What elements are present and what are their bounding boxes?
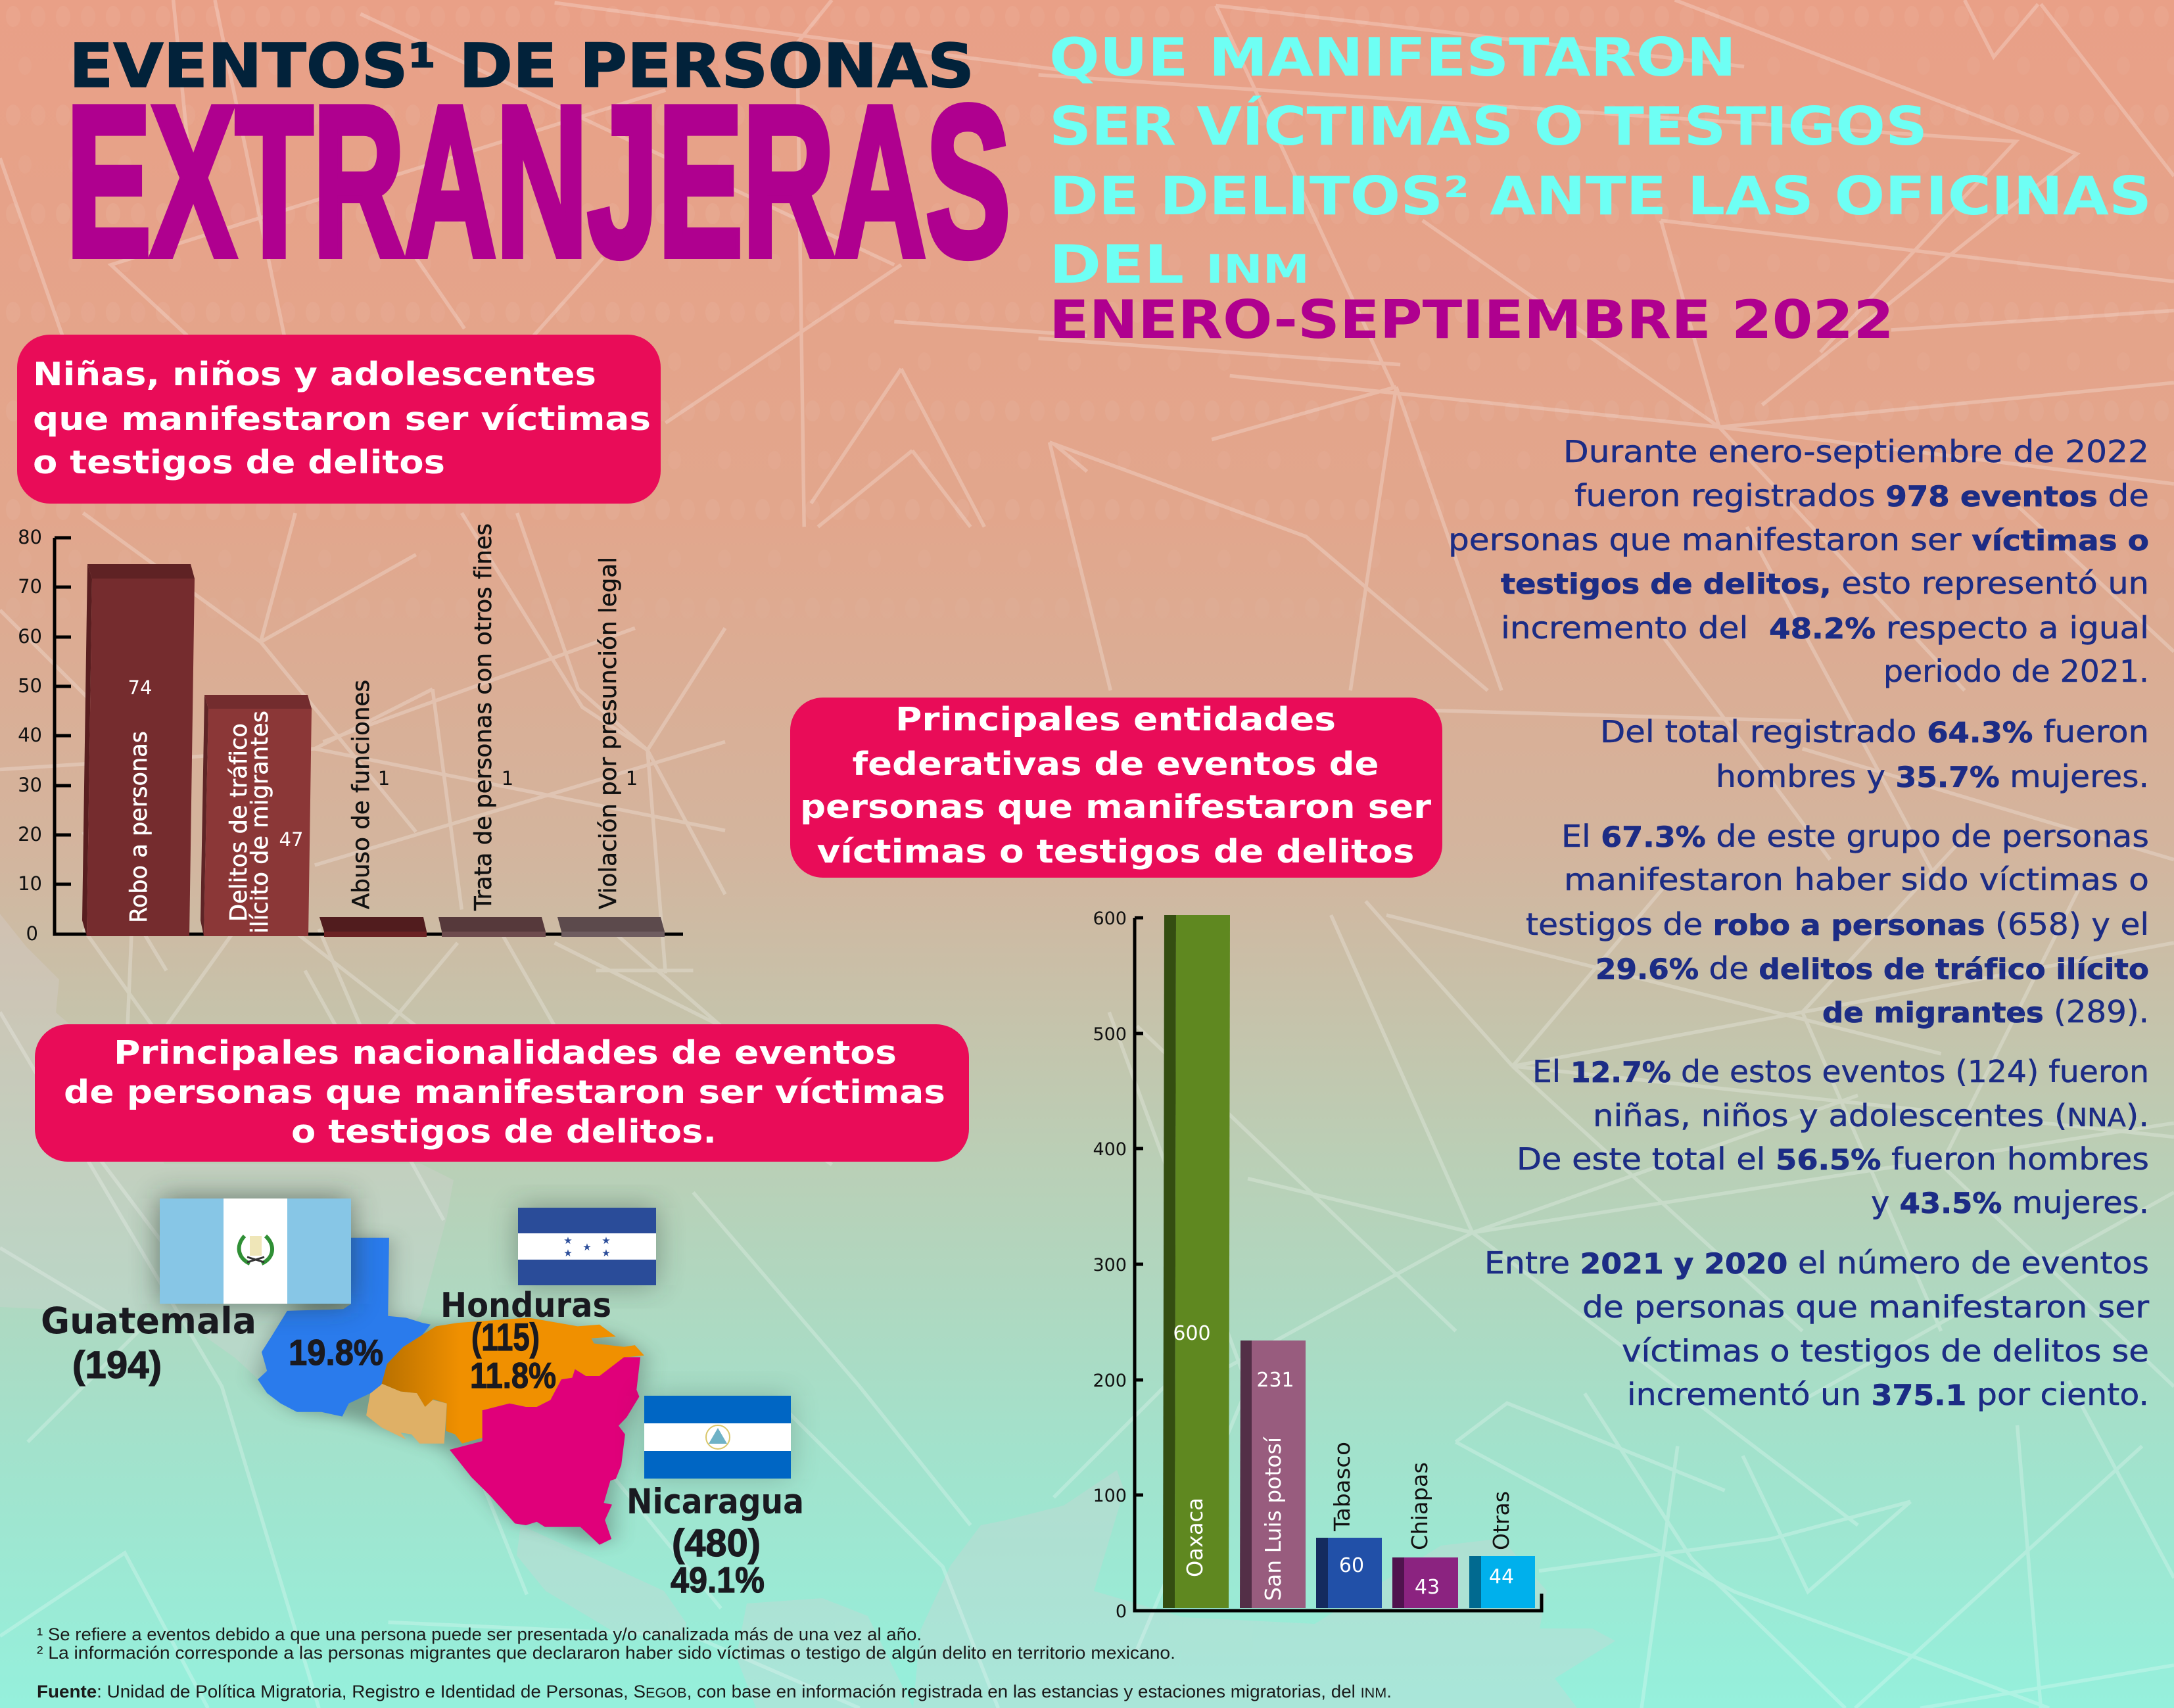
label: nicaragua: Nicaragua: [626, 1482, 804, 1522]
bar: otras: 44: [1489, 1565, 1514, 1588]
bar: oaxaca: 600: [1173, 1322, 1211, 1345]
bar: tabasco: [1316, 1442, 1382, 1608]
axis labels: 20: [18, 823, 42, 845]
panel: principales nacionalidades heading: de personas que manifestaron ser víctimas: [64, 1074, 945, 1111]
panel: principales entidades heading: federativas de eventos de: [852, 746, 1379, 783]
paragraph 5: incrementó un 375.1 por ciento.: [1627, 1377, 2149, 1412]
footnotes: ² La información corresponde a las personas migrantes que declararon haber sido víctimas o testigo de algún delito en territorio mexicano.: [37, 1643, 1175, 1663]
bar: delitos de tráfico: Delitos de tráfico: [225, 723, 252, 922]
label: honduras: Honduras: [440, 1286, 611, 1325]
flag: nicaragua: [644, 1396, 791, 1479]
bar chart: niñas, niños y adolescentes: [18, 523, 683, 945]
flag: guatemala: [160, 1198, 351, 1304]
panel: principales entidades heading: víctimas o testigos de delitos: [816, 833, 1415, 870]
axis labels: 50: [18, 675, 42, 697]
bar chart: entidades federativas: [1093, 909, 1542, 1622]
label: nicaragua: [626, 1482, 804, 1600]
paragraph 4: niñas, niños y adolescentes ( NNA).: [1593, 1098, 2149, 1133]
paragraph 4: y 43.5% mujeres.: [1871, 1185, 2149, 1220]
bar: robo a personas: Robo a personas: [126, 731, 153, 923]
panel: niñas, niños y adolescentes heading: o testigos de delitos: [33, 444, 445, 481]
axis labels: 0: [26, 922, 38, 945]
axis labels: 70: [18, 575, 42, 598]
axis labels: 30: [18, 774, 42, 796]
bar: tabasco: 60: [1339, 1554, 1364, 1577]
axis labels: 80: [18, 526, 42, 548]
paragraph 3: testigos de robo a personas (658) y el: [1526, 907, 2149, 942]
bar: oaxaca: Oaxaca: [1182, 1498, 1208, 1577]
stars: ★: [563, 1235, 573, 1246]
bar: violación por presunción legal: Violación por presunción legal: [595, 557, 622, 909]
paragraph 3: El 67.3% de este grupo de personas: [1561, 818, 2149, 854]
label: guatemala: [41, 1300, 256, 1387]
bar: violación por presunción legal: [557, 557, 665, 937]
bar: trata de personas: [438, 523, 546, 937]
paragraph 3: manifestaron haber sido víctimas o: [1564, 862, 2149, 897]
label: guatemala: Guatemala: [41, 1300, 256, 1342]
axis labels: 40: [18, 724, 42, 746]
label: nicaragua: 49.1%: [671, 1559, 765, 1600]
axis: [1135, 918, 1542, 1611]
axis labels: 600: [1093, 909, 1127, 929]
panel: principales entidades heading: personas que manifestaron ser: [800, 788, 1432, 826]
bar: chiapas: Chiapas: [1407, 1462, 1432, 1550]
label: honduras: (115): [471, 1316, 540, 1359]
bar: chiapas: [1392, 1462, 1458, 1608]
bar: otras: [1469, 1491, 1535, 1608]
bar: robo a personas: 74: [128, 676, 152, 699]
bar: delitos de tráfico: 47: [279, 828, 303, 851]
panel: principales nacionalidades heading: o testigos de delitos.: [291, 1113, 717, 1151]
paragraph 3: de migrantes (289).: [1822, 994, 2149, 1030]
paragraph 1: incremento del 48.2% respecto a igual: [1501, 610, 2149, 646]
stars: ★: [602, 1247, 611, 1259]
subtitle: SER VÍCTIMAS O TESTIGOS: [1049, 95, 1927, 157]
flag: honduras: [518, 1208, 656, 1285]
title: extranjeras: EXTRANJERAS: [66, 62, 1010, 300]
stars: ★: [582, 1241, 592, 1253]
axis labels: 0: [1116, 1601, 1127, 1622]
map shadow: [258, 1238, 644, 1545]
paragraph 5: [1484, 1245, 2149, 1412]
footnotes: ¹ Se refiere a eventos debido a que una persona puede ser presentada y/o canalizada más de una vez al año.: [37, 1625, 922, 1644]
bar: chiapas: 43: [1415, 1576, 1440, 1599]
bar: trata de personas: 1: [502, 767, 513, 790]
title: eventos de personas: EVENTOS¹ DE PERSONAS: [69, 31, 974, 101]
axis labels: 400: [1093, 1139, 1127, 1160]
emblem: [706, 1425, 730, 1449]
axis labels: [18, 526, 42, 945]
bar: abuso de funciones: 1: [378, 767, 390, 790]
bar: robo a personas: [82, 564, 195, 936]
subtitle: DE DELITOS² ANTE LAS OFICINAS: [1049, 166, 2152, 227]
period heading: ENERO-SEPTIEMBRE 2022: [1049, 289, 1894, 350]
country: nicaragua: [450, 1357, 640, 1545]
panel: niñas, niños y adolescentes heading: que manifestaron ser víctimas: [33, 400, 651, 438]
bar: san luis potosí: San Luis potosí: [1260, 1436, 1286, 1601]
axis labels: 200: [1093, 1371, 1127, 1391]
stars: ★: [602, 1235, 611, 1246]
bar: abuso de funciones: [319, 680, 427, 937]
background map silhouette: [0, 914, 1615, 1708]
paragraph 1: personas que manifestaron ser víctimas o: [1448, 522, 2149, 557]
axis labels: 500: [1093, 1024, 1127, 1045]
paragraph 5: víctimas o testigos de delitos se: [1622, 1333, 2149, 1369]
panel: principales entidades heading: Principales entidades: [895, 701, 1336, 738]
bar: san luis potosí: [1240, 1340, 1306, 1608]
axis labels: 10: [18, 872, 42, 895]
source: Fuente: Unidad de Política Migratoria, Registro e Identidad de Personas, S EGOB, con base en información registrada en las estancias y estaciones migratorias, del INM.: [37, 1682, 1392, 1701]
bar: trata de personas: Trata de personas con otros fines: [470, 523, 497, 911]
bar: delitos de tráfico: ilícito de migrantes: [247, 711, 273, 934]
stars: ★: [563, 1247, 573, 1259]
paragraph 3: 29.6% de delitos de tráfico ilícito: [1595, 951, 2149, 986]
bar: oaxaca: [1163, 915, 1230, 1608]
axis labels: 60: [18, 625, 42, 648]
subtitle: [1049, 27, 2152, 295]
paragraph 1: fueron registrados 978 eventos de: [1574, 478, 2149, 513]
paragraph 3: [1526, 818, 2149, 1030]
bar: tabasco: Tabasco: [1329, 1442, 1355, 1532]
country: guatemala: [258, 1238, 431, 1417]
country: honduras: [381, 1317, 644, 1444]
bar: abuso de funciones: Abuso de funciones: [348, 680, 375, 909]
background dot pattern: [0, 0, 2174, 690]
panel: principales nacionalidades heading: [35, 1024, 969, 1162]
axis labels: [1093, 909, 1127, 1622]
footnotes: [37, 1625, 1392, 1701]
paragraph 5: Entre 2021 y 2020 el número de eventos: [1484, 1245, 2149, 1281]
bar: violación por presunción legal: 1: [626, 767, 638, 790]
paragraph 1: periodo de 2021.: [1883, 653, 2149, 689]
map: central america countries: [258, 1238, 644, 1545]
paragraph 4: De este total el 56.5% fueron hombres: [1517, 1141, 2149, 1177]
country: el salvador: [366, 1383, 447, 1444]
paragraph 2: [1600, 714, 2149, 794]
body text: resumen: [1448, 434, 2149, 1412]
panel: principales entidades heading: [790, 698, 1442, 878]
paragraph 1: testigos de delitos, esto representó un: [1501, 565, 2149, 601]
emblem: [239, 1236, 272, 1264]
paragraph 1: [1448, 434, 2149, 689]
label: guatemala percent: 19.8%: [289, 1332, 383, 1373]
paragraph 2: Del total registrado 64.3% fueron: [1600, 714, 2149, 749]
panel: niñas, niños y adolescentes heading: Niñas, niños y adolescentes: [33, 356, 596, 393]
label: guatemala: (194): [72, 1344, 162, 1387]
label: nicaragua: (480): [672, 1522, 761, 1565]
panel: niñas, niños y adolescentes heading: [17, 335, 661, 504]
bar: otras: Otras: [1488, 1491, 1514, 1550]
paragraph 5: de personas que manifestaron ser: [1582, 1289, 2149, 1325]
label: honduras: [440, 1286, 611, 1396]
stars: [563, 1235, 611, 1259]
paragraph 4: El 12.7% de estos eventos (124) fueron: [1532, 1054, 2149, 1089]
bar: delitos de tráfico: [201, 695, 312, 936]
axis labels: 100: [1093, 1486, 1127, 1506]
subtitle: QUE MANIFESTARON: [1049, 27, 1736, 88]
axis labels: 300: [1093, 1255, 1127, 1275]
paragraph 1: Durante enero-septiembre de 2022: [1563, 434, 2149, 469]
bar: san luis potosí: 231: [1256, 1369, 1294, 1392]
axis: [55, 538, 683, 934]
paragraph 4: [1517, 1054, 2149, 1220]
label: honduras: 11.8%: [470, 1355, 556, 1396]
subtitle: DEL INM: [1049, 234, 1310, 295]
panel: principales nacionalidades heading: Principales nacionalidades de eventos: [114, 1034, 897, 1072]
paragraph 2: hombres y 35.7% mujeres.: [1716, 759, 2149, 794]
